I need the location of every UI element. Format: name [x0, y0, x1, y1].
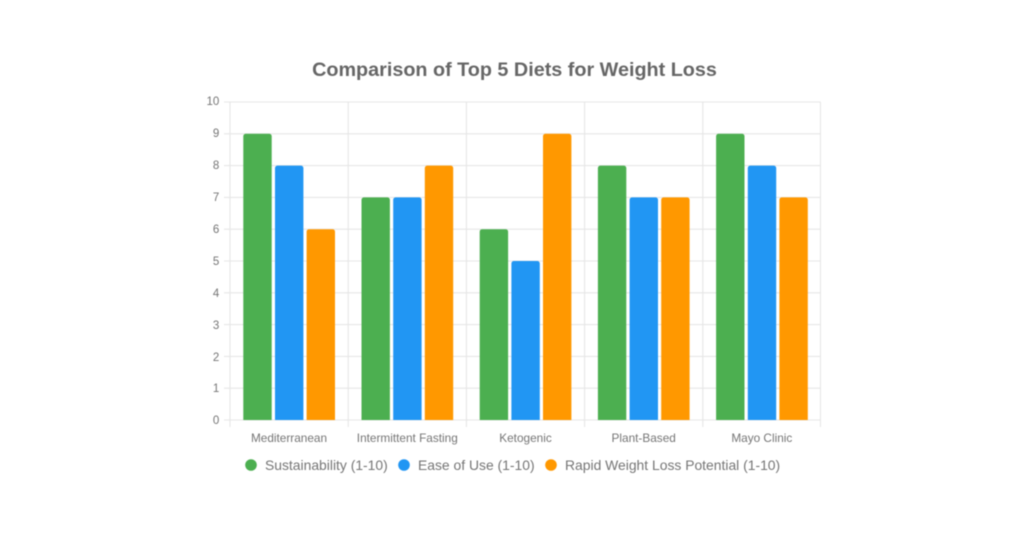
y axis labels: 0	[213, 415, 219, 427]
legend item: Sustainability: Sustainability (1-10)	[265, 457, 388, 473]
y axis labels: 1	[213, 383, 219, 395]
y axis labels: 7	[213, 192, 219, 204]
group: Mediterranean	[243, 134, 335, 420]
y axis labels: 6	[213, 224, 219, 236]
y axis labels: 10	[207, 96, 219, 108]
group: Intermittent Fasting	[362, 166, 453, 420]
title: Comparison of Top 5 Diets for Weight Loss	[312, 59, 717, 81]
group: Mayo Clinic	[716, 134, 808, 420]
group: Ketogenic	[480, 134, 571, 420]
legend item: Rapid Weight Loss Potential: Rapid Weight Loss Potential (1-10)	[565, 457, 780, 473]
x axis labels: Mediterranean	[251, 431, 327, 445]
x axis labels: Mayo Clinic	[731, 431, 792, 445]
y axis labels: 8	[213, 160, 219, 172]
x axis labels	[251, 431, 792, 445]
legend item: Ease of Use: Ease of Use (1-10)	[418, 457, 535, 473]
y axis labels	[207, 96, 220, 427]
x axis labels: Ketogenic	[499, 431, 552, 445]
bar chart	[207, 96, 821, 445]
x axis labels: Intermittent Fasting	[357, 431, 458, 445]
group: Plant-Based	[598, 166, 690, 420]
y axis labels: 2	[213, 352, 219, 364]
y axis labels: 9	[213, 128, 219, 140]
x axis labels: Plant-Based	[612, 431, 676, 445]
y axis labels: 4	[213, 288, 220, 300]
y axis labels: 3	[213, 320, 219, 332]
y axis labels: 5	[213, 256, 219, 268]
legend	[245, 457, 780, 473]
